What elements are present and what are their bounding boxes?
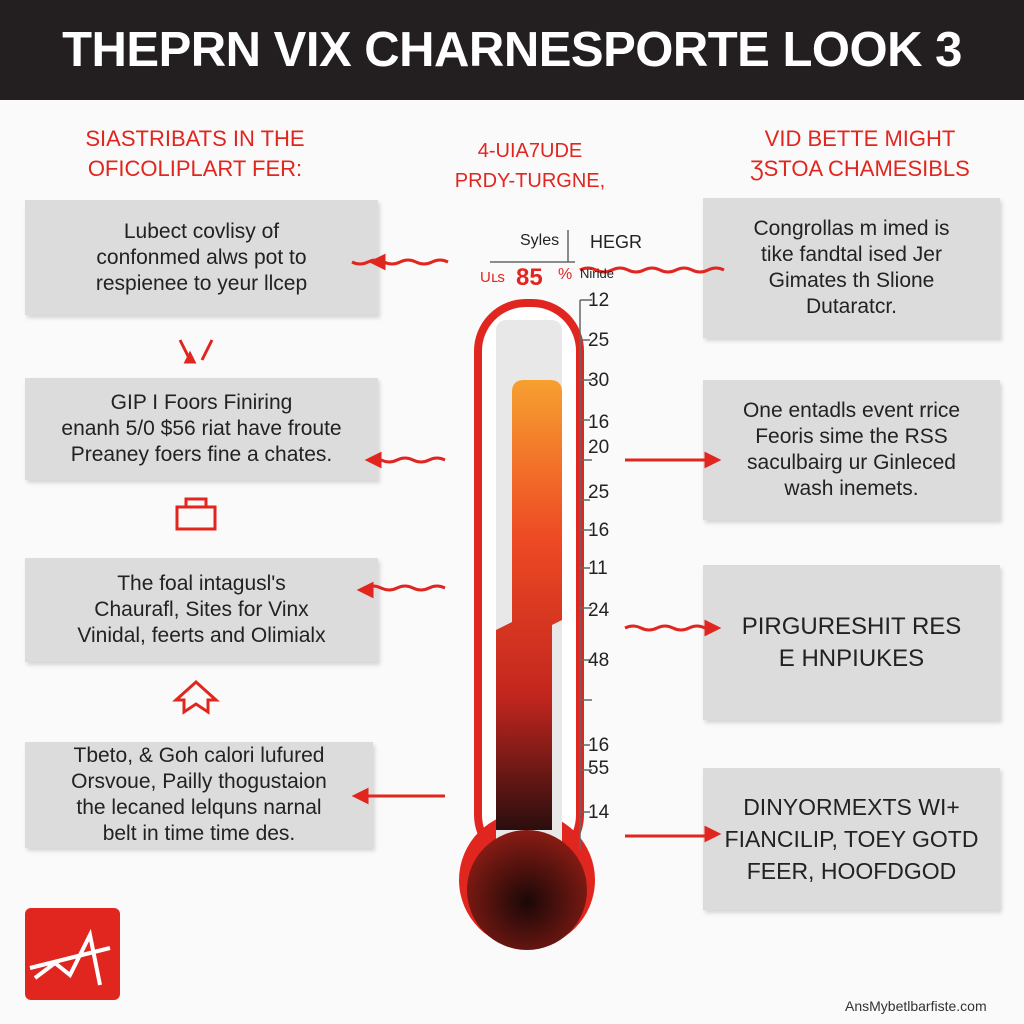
- right box 4: FEER, HOOFDGOD: [747, 858, 956, 884]
- left box 3: [25, 558, 378, 662]
- text: 16: [588, 412, 609, 433]
- right box 3: [703, 565, 1000, 720]
- left box 1: Lubect covlisy of: [124, 220, 279, 242]
- gauge label: Niride: [580, 266, 614, 281]
- arrow right 1: [580, 268, 724, 272]
- arrow left 3: [360, 584, 445, 596]
- right box 2: saculbairg ur Ginleced: [747, 451, 956, 474]
- arrow left 1: [352, 256, 448, 268]
- scale labels: [588, 290, 609, 823]
- left box 3: Chaurafl, Sites for Vinx: [94, 598, 309, 621]
- right box 1: Gimates th Slione: [769, 269, 934, 292]
- gauge label: HEGR: [590, 232, 642, 252]
- arrow right 2: [625, 454, 718, 466]
- text: 20: [588, 437, 609, 458]
- right box 3: PIRGURESHIT RES: [742, 612, 961, 640]
- logo: [25, 908, 120, 1000]
- heading: right: VID BETTE MIGHT: [765, 126, 955, 151]
- header bar: THEPRN VIX CHARNESPORTE LOOK 3: [62, 23, 962, 77]
- header bar: [0, 0, 1024, 100]
- left box 2: GIP I Foors Finiring: [111, 391, 292, 414]
- heading: right: ƷSTOA CHAMESIBLS: [750, 156, 970, 181]
- gauge label: Uւs: [480, 269, 505, 286]
- left box 4: Tbeto, & Goh calori lufured: [74, 744, 324, 767]
- right box 1: Congrollas m imed is: [753, 217, 950, 240]
- gauge label: [480, 232, 642, 291]
- text: 25: [588, 330, 609, 351]
- right box 1: [703, 198, 1000, 338]
- text: 12: [588, 290, 609, 311]
- icon: down chevrons: [180, 340, 212, 362]
- text: 55: [588, 758, 609, 779]
- left box 3: Vinidal, feerts and Olimialx: [77, 624, 326, 647]
- heading: center: PRDY-TURGNE,: [455, 170, 605, 192]
- gauge label: Syles: [520, 232, 559, 249]
- left box 4: belt in time time des.: [103, 822, 295, 845]
- heading: center: [455, 140, 605, 192]
- watermark: AnsMybetlbarfiste.com: [845, 998, 987, 1014]
- right box 4: [703, 768, 1000, 910]
- left box 4: Orsvoue, Pailly thogustaion: [71, 770, 327, 793]
- right box 2: [703, 380, 1000, 520]
- arrow right 4: [625, 828, 718, 840]
- right box 2: Feoris sime the RSS: [755, 425, 948, 448]
- right box 3: E HNPIUKES: [779, 644, 924, 672]
- thermometer: [459, 303, 595, 950]
- heading: left: [85, 126, 305, 181]
- text: 25: [588, 482, 609, 503]
- left box 2: [25, 378, 378, 480]
- text: 48: [588, 650, 609, 671]
- right box 1: tike fandtal ised Jer: [761, 243, 942, 266]
- left box 4: [25, 742, 373, 848]
- right box 2: One entadls event rrice: [743, 399, 960, 422]
- left box 2: enanh 5/0 $56 riat have froute: [61, 417, 342, 440]
- right box 4: DINYORMEXTS WI+: [743, 794, 960, 820]
- left box 1: confonmed alws pot to: [96, 246, 307, 268]
- arrow left 2: [368, 454, 445, 466]
- text: 16: [588, 520, 609, 541]
- text: 24: [588, 600, 609, 621]
- icon: up arrow: [176, 682, 216, 712]
- text: 16: [588, 735, 609, 756]
- arrow right 3: [625, 622, 718, 634]
- heading: right: [750, 126, 970, 181]
- scale ticks: [490, 230, 592, 850]
- gauge label: 85: [516, 264, 543, 291]
- right box 2: wash inemets.: [784, 477, 919, 500]
- left box 3: The foal intagusl's: [117, 572, 286, 595]
- right box 4: FIANCILIP, TOEY GOTD: [725, 826, 978, 852]
- left box 4: the lecaned lelquns narnal: [76, 796, 322, 819]
- left box 1: [25, 200, 378, 315]
- left box 2: Preaney foers fine a chates.: [71, 443, 332, 466]
- gauge label: %: [558, 266, 572, 283]
- left box 1: respienee to yeur llcep: [96, 272, 307, 294]
- heading: center: 4-UIA7UDE: [478, 140, 582, 162]
- text: 14: [588, 802, 609, 823]
- heading: left: OFICOLIPLART FER:: [88, 156, 302, 181]
- right box 1: Dutaratcr.: [806, 295, 897, 318]
- arrow left 4: [355, 790, 445, 802]
- text: 30: [588, 370, 609, 391]
- text: 11: [588, 558, 608, 579]
- heading: left: SIASTRIBATS IN THE: [85, 126, 305, 151]
- icon: lock: [177, 499, 215, 529]
